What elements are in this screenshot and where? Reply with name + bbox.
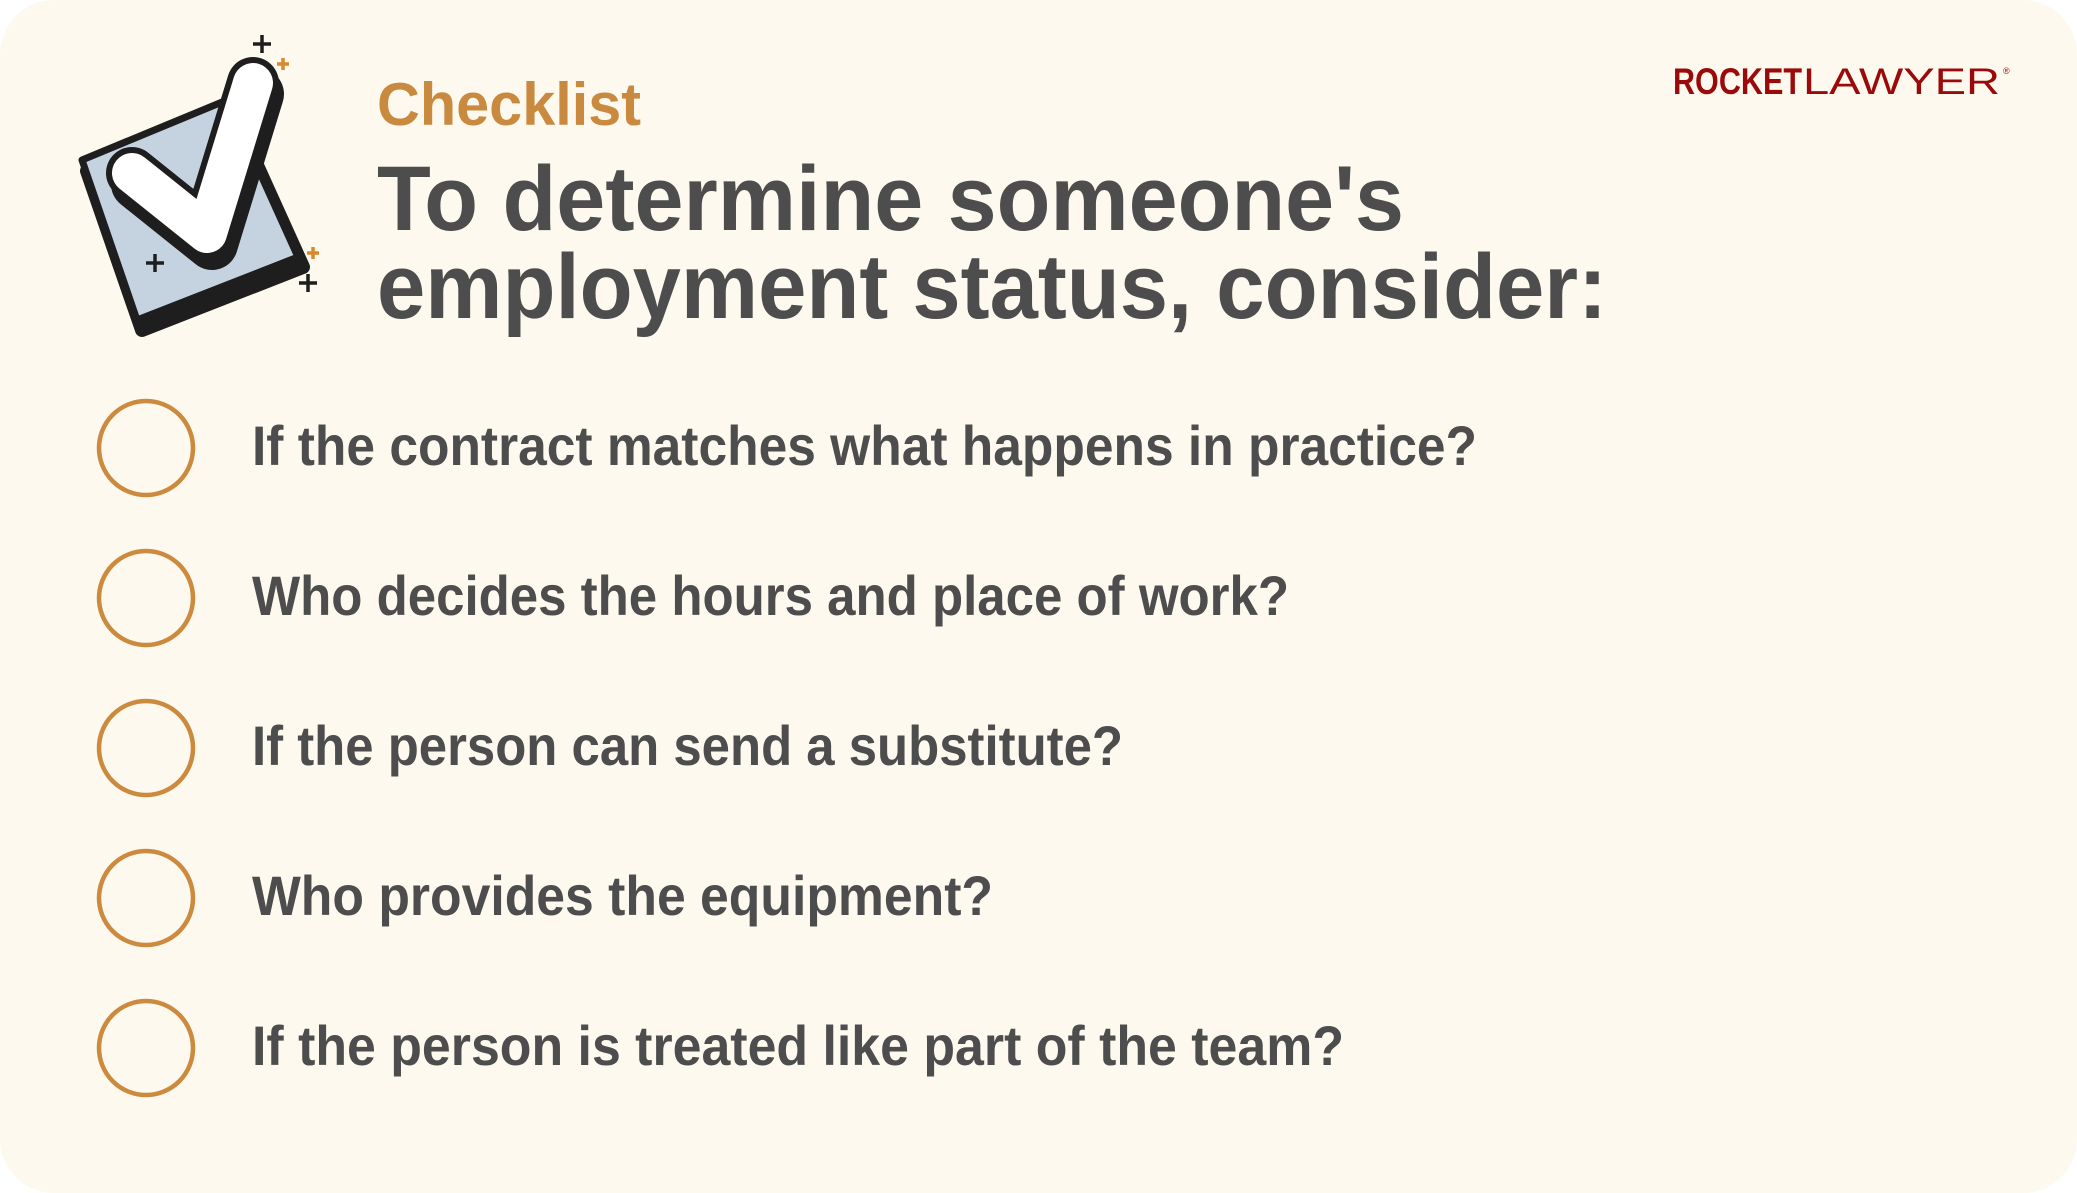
logo: Rocket Lawyer: ROCKET (1673, 61, 1802, 102)
logo: Rocket Lawyer: LAWYER (1803, 61, 2000, 102)
item 4: Who provides the equipment? (252, 864, 993, 927)
logo: Rocket Lawyer (1673, 61, 2010, 102)
item 5: If the person is treated like part of the team? (252, 1014, 1344, 1077)
label: Checklist: Checklist (377, 71, 641, 138)
item 1: If the contract matches what happens in practice? (252, 414, 1477, 477)
item 3 (99, 701, 1123, 795)
checklist items (99, 401, 1477, 1095)
logo: Rocket Lawyer: ® (2003, 66, 2010, 76)
item 3: If the person can send a substitute? (252, 714, 1123, 777)
item 4 (99, 851, 993, 945)
title (377, 148, 1607, 338)
title: To determine someone's (377, 148, 1404, 250)
item 1 (99, 401, 1477, 495)
item 2: Who decides the hours and place of work? (252, 564, 1289, 627)
item 5 (99, 1001, 1344, 1095)
item 2 (99, 551, 1289, 645)
title: employment status, consider: (377, 236, 1607, 338)
icon: checkbox with checkmark (82, 35, 319, 330)
